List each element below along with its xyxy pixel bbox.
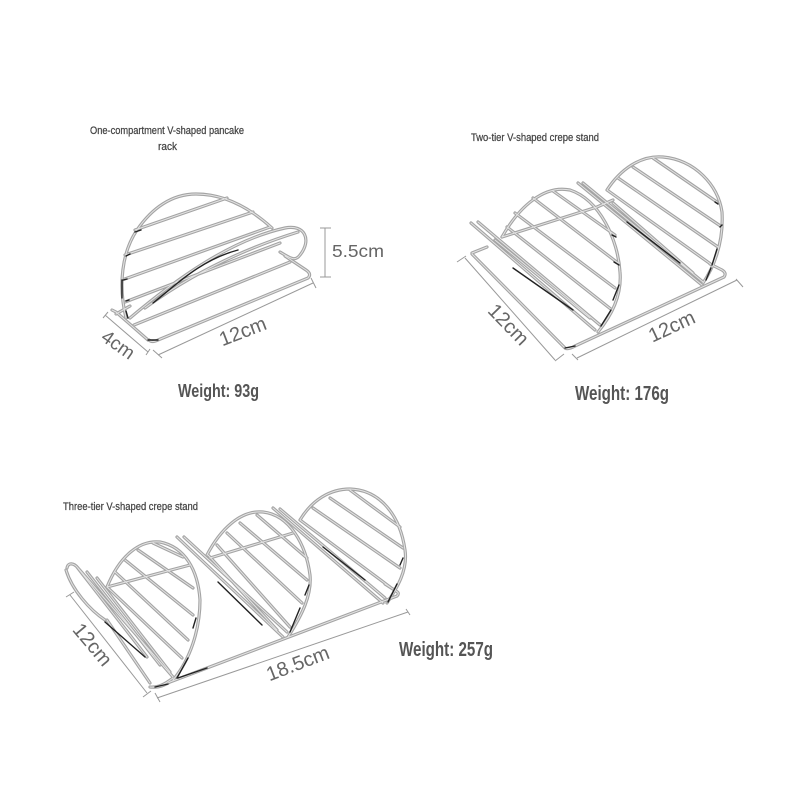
- weight: 257g: Weight: 257g: [399, 639, 493, 661]
- title: two-tier: Two-tier V-shaped crepe stand: [471, 132, 599, 144]
- dimension: length 12cm: 12cm: [216, 313, 270, 351]
- dimension: depth 12cm: [457, 256, 564, 361]
- dimension: height 5.5cm: 5.5cm: [332, 241, 384, 261]
- rack illustration: two-tier: [471, 157, 725, 349]
- title: one-compartment: [90, 125, 244, 153]
- dimension: depth 12cm: [66, 592, 151, 697]
- dimension: depth 12cm: 12cm: [483, 300, 533, 350]
- title: three-tier: Three-tier V-shaped crepe stand: [63, 501, 198, 513]
- dimension: length 12cm: [153, 278, 316, 358]
- dimension: length 12cm: 12cm: [645, 307, 699, 347]
- dimension: height 5.5cm: [320, 228, 384, 277]
- rack illustration: three-tier: [66, 489, 406, 687]
- title: one-compartment: One-compartment V-shaped pancake: [90, 125, 244, 137]
- rack illustration: one-compartment: [112, 194, 310, 342]
- panel: two-tier rack: [457, 132, 743, 405]
- dimension: depth 12cm: 12cm: [68, 619, 116, 671]
- dimension: length 18.5cm: [155, 609, 410, 702]
- weight: 176g: Weight: 176g: [575, 383, 669, 405]
- panel: one-compartment rack: [90, 125, 384, 401]
- dimension: length 18.5cm: 18.5cm: [263, 642, 333, 686]
- dimension: width 4cm: [97, 312, 150, 364]
- panel: three-tier rack: [63, 489, 493, 702]
- title: one-compartment: rack: [158, 141, 177, 153]
- dimension: length 12cm: [572, 279, 743, 360]
- weight: 93g: Weight: 93g: [178, 381, 259, 401]
- dimension: width 4cm: 4cm: [97, 327, 138, 364]
